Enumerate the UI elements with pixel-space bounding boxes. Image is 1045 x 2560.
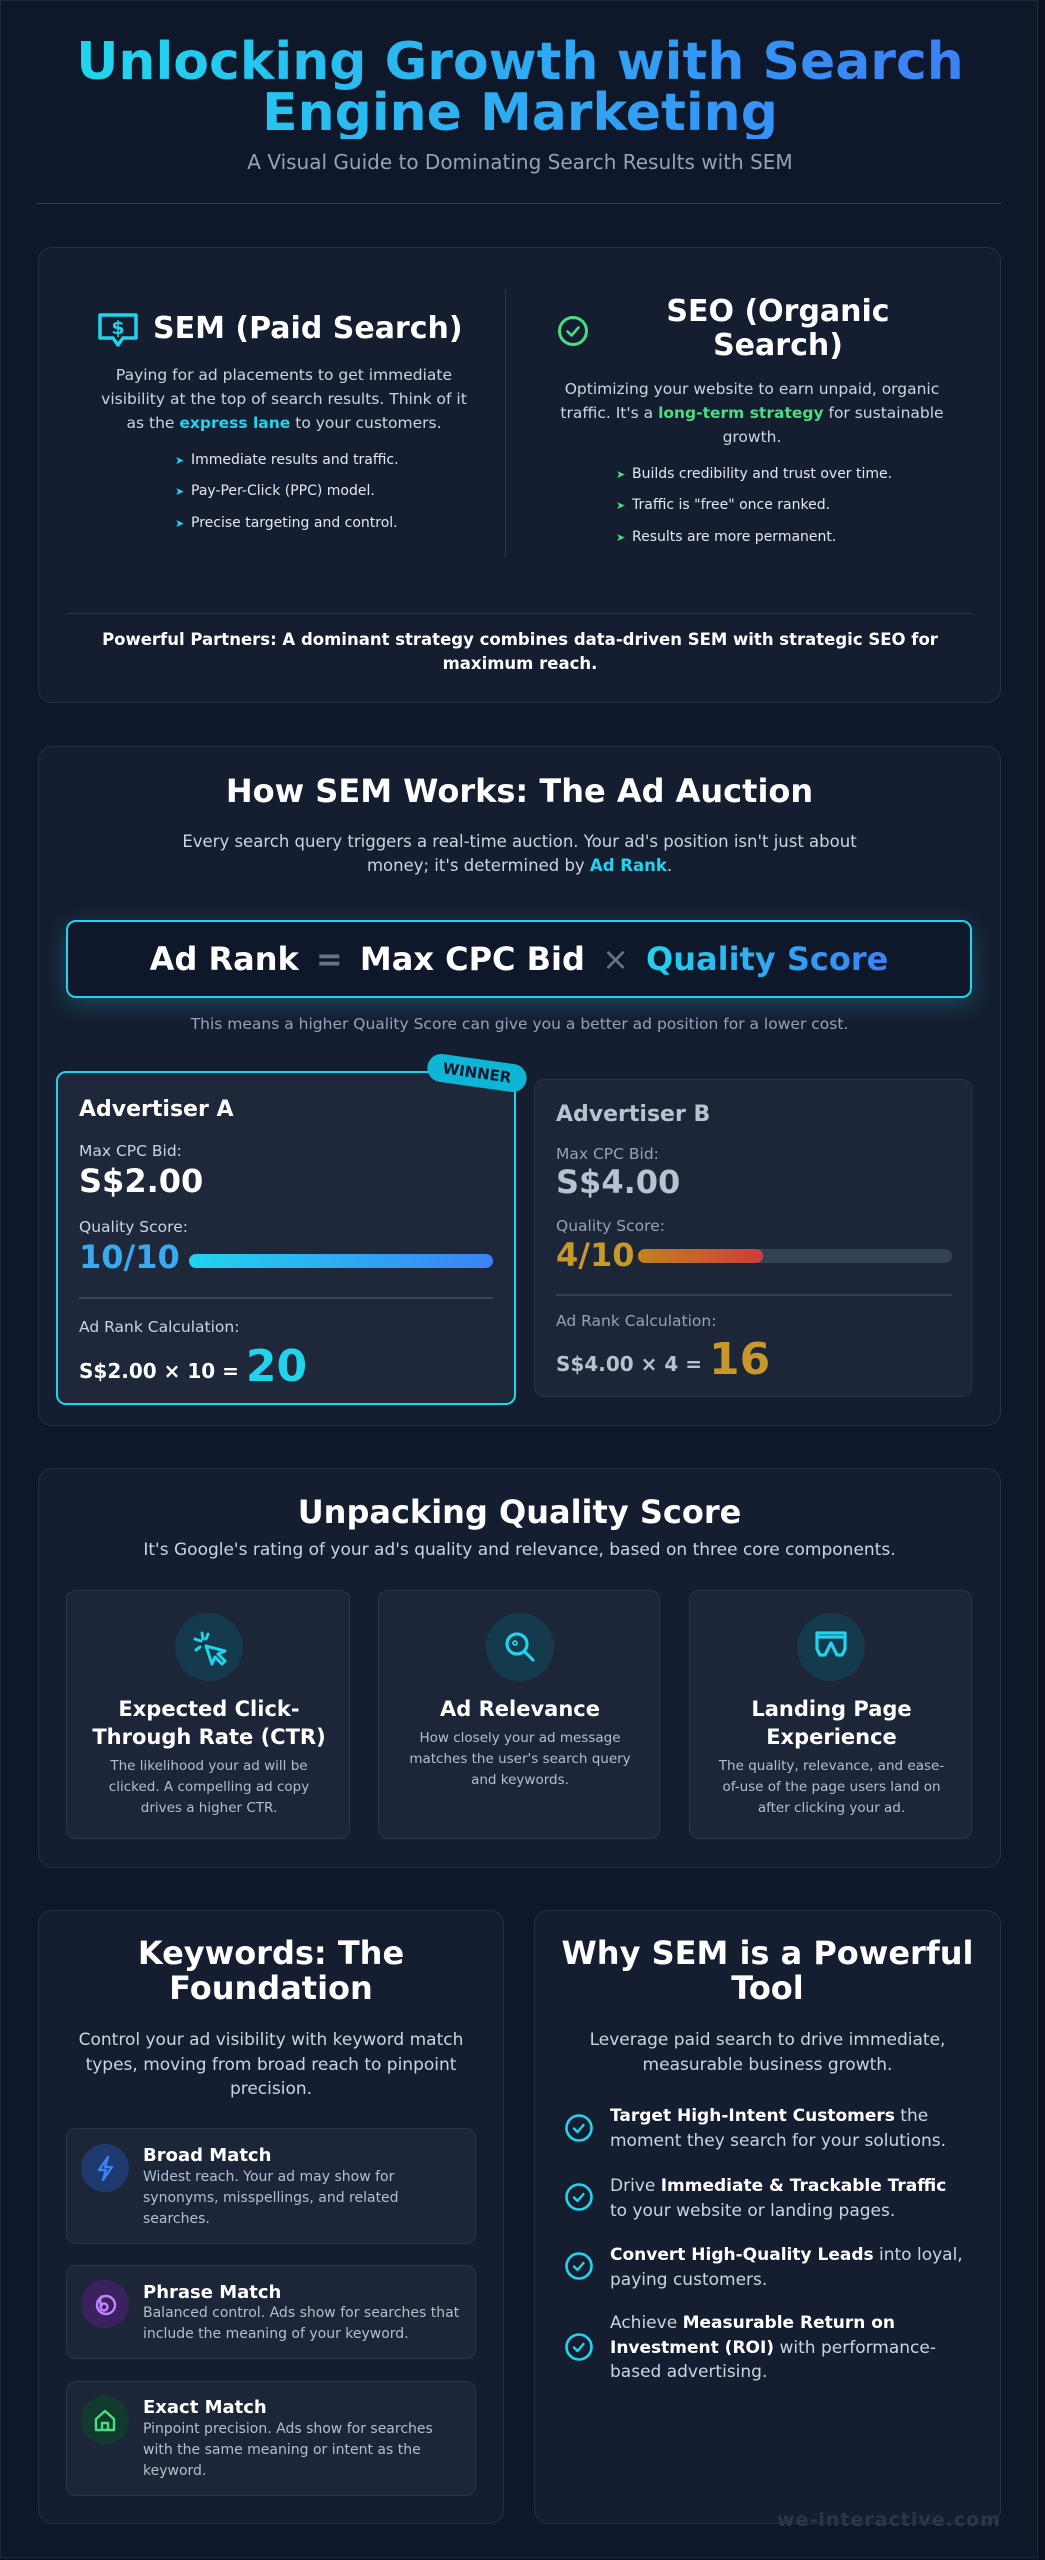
title: Engine Marketing [262, 83, 778, 143]
icon: SEO check [558, 316, 588, 346]
heading: keywords: Foundation [169, 1969, 373, 2007]
title: Unlocking Growth with Search [76, 32, 964, 92]
text: SEO description: Optimizing your website to earn unpaid, organic [565, 380, 939, 398]
list: benefits [565, 2106, 963, 2382]
card: exact match: keyword. [143, 2463, 206, 2479]
text: auction intro: money; it's determined by Ad Rank. [367, 856, 672, 875]
card: broad match: Broad Match [143, 2145, 271, 2166]
text: auction intro: Every search query triggers a real-time auction. Your ad's position isn't just about [182, 832, 857, 851]
card: broad match: Widest reach. Your ad may show for [143, 2169, 394, 2185]
panel: quality score [38, 1468, 1001, 1868]
text: Precise targeting and control. [191, 515, 398, 531]
text: keywords intro: Control your ad visibility with keyword match [79, 2030, 463, 2050]
card: advertiser A [56, 1071, 516, 1405]
heading: landing page: Landing Page [751, 1697, 912, 1721]
panel: SEM vs SEO [38, 247, 1001, 703]
text: keywords intro [79, 2030, 463, 2099]
text: Builds credibility and trust over time. [632, 466, 892, 482]
heading: keywords [138, 1934, 404, 2007]
card: advertiser B: 4/10 [556, 1236, 634, 1274]
heading: CTR: Expected Click- [118, 1697, 300, 1721]
card: landing page: after clicking your ad. [758, 1800, 905, 1816]
card: exact match: Exact Match [143, 2397, 267, 2418]
text: keywords intro: precision. [230, 2079, 312, 2099]
card: advertiser B: S$4.00 × 4 = 16 [556, 1334, 770, 1385]
heading: ad auction: How SEM Works: The Ad Auction [226, 772, 813, 810]
text: SEM description: as the express lane to your customers. [126, 414, 442, 432]
card: advertiser A: S$2.00 [79, 1162, 203, 1200]
card: CTR [66, 1590, 350, 1839]
text: SEO description: growth. [723, 428, 781, 446]
badge: winner: WINNER [442, 1059, 512, 1087]
text: Traffic is "free" once ranked. [632, 497, 830, 513]
heading: ad relevance: Ad Relevance [440, 1697, 600, 1721]
card: ad relevance [378, 1590, 660, 1839]
callout: powerful partners: maximum reach. [443, 654, 597, 673]
icon: SEM dollar chat [98, 313, 138, 347]
card: advertiser B: S$4.00 [556, 1163, 680, 1201]
card: phrase match: Balanced control. Ads show for searches that [143, 2305, 459, 2321]
card: landing page: of-use of the page users land on [722, 1779, 941, 1795]
text: Results are more permanent. [632, 529, 836, 545]
card: phrase match: include the meaning of your keyword. [143, 2326, 409, 2342]
text: ➤ [175, 517, 184, 530]
list: SEO bullets [616, 466, 892, 545]
list: benefits: Convert High-Quality Leads into loyal, [610, 2245, 963, 2265]
text: ➤ [616, 499, 625, 512]
subtitle: A Visual Guide to Dominating Search Results with SEM [247, 150, 793, 174]
card: advertiser A: Max CPC Bid: [79, 1142, 182, 1160]
heading: SEO [666, 294, 890, 363]
callout: powerful partners: Powerful Partners: A dominant strategy combines data-driven SEM with strategic SEO for [102, 630, 938, 649]
list: benefits: based advertising. [610, 2362, 767, 2382]
heading: quality score: Unpacking Quality Score [298, 1493, 741, 1531]
list: benefits: Drive Immediate & Trackable Traffic [610, 2176, 946, 2196]
card: landing page [689, 1590, 972, 1839]
formula box: Ad Rank = Max CPC Bid × Quality Score [150, 940, 888, 978]
panel: keywords [38, 1910, 504, 2524]
heading: SEO: Search) [713, 328, 843, 363]
card: broad match: searches. [143, 2211, 210, 2227]
card: phrase match [66, 2265, 476, 2359]
list: benefits: Target High-Intent Customers the [610, 2106, 928, 2126]
heading: why SEM [561, 1934, 974, 2007]
card: advertiser A: 10/10 [79, 1238, 180, 1276]
heading: SEO: SEO (Organic [666, 294, 890, 329]
icon: search [486, 1613, 554, 1681]
card: landing page: The quality, relevance, and ease- [719, 1758, 944, 1774]
text: auction intro [182, 832, 857, 875]
text: keywords intro: types, moving from broad reach to pinpoint [86, 2054, 456, 2074]
card: advertiser B [534, 1079, 972, 1397]
card: exact match: with the same meaning or intent as the [143, 2442, 421, 2458]
icon: home [81, 2396, 129, 2444]
card: advertiser A: S$2.00 × 10 = 20 [79, 1341, 307, 1392]
text: Pay-Per-Click (PPC) model. [191, 483, 375, 499]
icon: click [175, 1613, 243, 1681]
text: SEO description: traffic. It's a long-term strategy for sustainable [560, 404, 944, 422]
card: broad match: synonyms, misspellings, and related [143, 2190, 399, 2206]
icon: lightning [81, 2144, 129, 2192]
card: advertiser A: Advertiser A [79, 1097, 234, 1122]
list: benefits: Achieve Measurable Return on [610, 2313, 895, 2333]
card: advertiser A: Ad Rank Calculation: [79, 1318, 239, 1336]
watermark: we-interactive.com [777, 2509, 1001, 2531]
card: advertiser B: Quality Score: [556, 1217, 665, 1235]
heading: why SEM: Tool [731, 1969, 804, 2007]
heading: SEM: SEM (Paid Search) [153, 311, 463, 346]
card: advertiser B: Advertiser B [556, 1102, 710, 1127]
text: SEM description: visibility at the top of search results. Think of it [101, 390, 467, 408]
panel: why SEM [534, 1910, 1001, 2524]
text: formula note: This means a higher Quality Score can give you a better ad position for a lower cost. [191, 1015, 848, 1033]
text: why SEM intro: Leverage paid search to drive immediate, [590, 2030, 945, 2050]
heading: landing page [751, 1697, 912, 1749]
list: benefits: moment they search for your solutions. [610, 2130, 946, 2150]
card: phrase match: Phrase Match [143, 2282, 281, 2303]
card: broad match [66, 2128, 476, 2244]
panel: ad auction [38, 746, 1001, 1426]
card: advertiser B: Ad Rank Calculation: [556, 1312, 716, 1330]
text: ➤ [616, 531, 625, 544]
card: exact match [66, 2381, 476, 2496]
text: ➤ [175, 485, 184, 498]
heading: why SEM: Why SEM is a Powerful [561, 1934, 974, 1972]
text: SEM description: Paying for ad placements to get immediate [116, 366, 452, 384]
card: ad relevance: and keywords. [471, 1772, 569, 1788]
list: benefits: paying customers. [610, 2270, 767, 2290]
formula box [66, 920, 972, 998]
badge: winner [426, 1052, 528, 1094]
icon: landing page [797, 1613, 865, 1681]
text: why SEM intro: measurable business growth. [643, 2054, 892, 2074]
text: ➤ [175, 454, 184, 467]
card: advertiser B: Max CPC Bid: [556, 1145, 659, 1163]
card: ad relevance: matches the user's search query [409, 1751, 631, 1767]
card: ad relevance: How closely your ad message [420, 1730, 620, 1746]
text: Immediate results and traffic. [191, 452, 399, 468]
title [21, 37, 1019, 139]
card: CTR: The likelihood your ad will be [110, 1758, 308, 1774]
icon: SEM dollar chat: $ [111, 317, 125, 339]
heading: CTR [92, 1697, 326, 1749]
card: advertiser A: Quality Score: [79, 1218, 188, 1236]
list: benefits: Investment (ROI) with performance- [610, 2338, 936, 2358]
heading: CTR: Through Rate (CTR) [92, 1725, 326, 1749]
card: exact match: Pinpoint precision. Ads show for searches [143, 2421, 433, 2437]
heading: landing page: Experience [766, 1725, 897, 1749]
card: CTR: clicked. A compelling ad copy [109, 1779, 309, 1795]
list: SEM bullets [175, 452, 399, 531]
text: SEM description [101, 366, 467, 432]
heading: keywords: Keywords: The [138, 1934, 404, 1972]
list: benefits: to your website or landing pages. [610, 2200, 895, 2220]
text: quality score intro: It's Google's rating of your ad's quality and relevance, based on three core components. [143, 1540, 896, 1560]
icon: phrase [81, 2280, 129, 2328]
text: SEO description [560, 380, 944, 446]
card: CTR: drives a higher CTR. [141, 1800, 277, 1816]
callout: powerful partners [102, 630, 938, 673]
text: ➤ [616, 468, 625, 481]
text: why SEM intro [590, 2030, 945, 2074]
